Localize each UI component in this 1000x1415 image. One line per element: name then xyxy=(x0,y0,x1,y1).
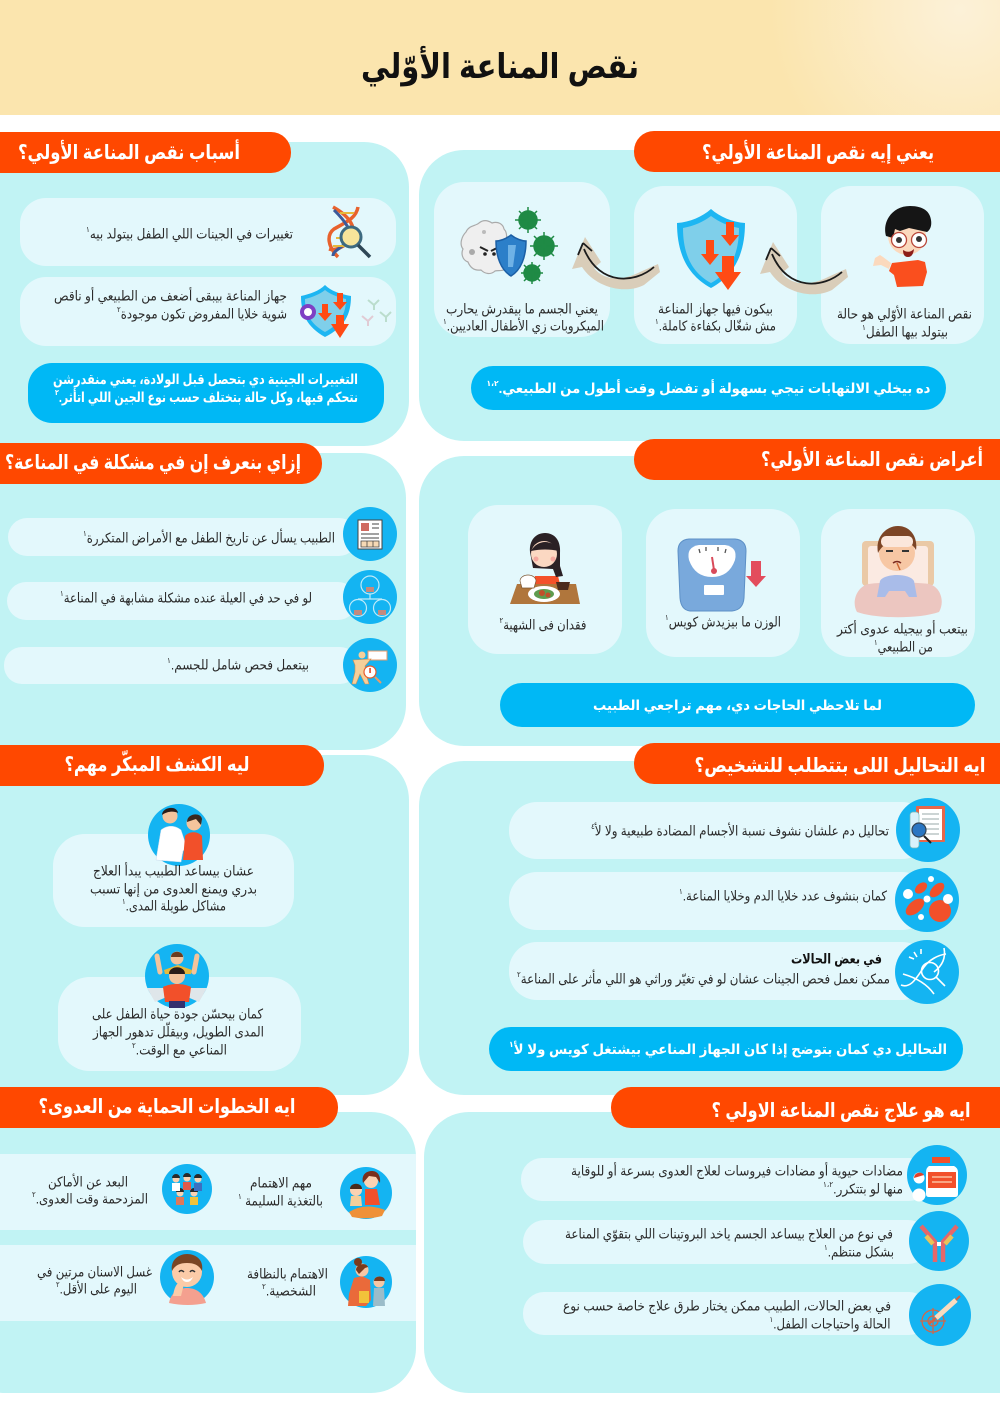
card: start treatment early xyxy=(53,804,294,927)
item: teeth xyxy=(37,1264,152,1298)
item: medical history xyxy=(8,507,397,561)
text xyxy=(836,620,968,656)
text: عشان بيساعد الطبيب يبدأ العلاج xyxy=(93,862,254,880)
text: ٢ xyxy=(500,616,503,624)
item: full exam: ١ xyxy=(167,656,171,664)
text: ٢ xyxy=(132,1040,136,1050)
text: تغييرات في الجينات اللي الطفل بيتولد بيه xyxy=(90,226,319,242)
icon: shield with down arrows xyxy=(677,209,745,290)
heading: symptoms xyxy=(634,439,1000,480)
item: teeth: اليوم على الأقل. xyxy=(60,1282,150,1296)
item: full exam xyxy=(4,638,397,692)
text: ١ xyxy=(874,638,878,646)
item: immunoglobulin: ١ xyxy=(824,1242,828,1252)
card: weak immune system xyxy=(634,186,797,344)
callout: ده بيخلي الالتهابات تيجي بسهولة أو تفضل وقت أطول من الطبيعي. xyxy=(499,380,955,396)
heading: causes xyxy=(0,132,291,173)
text xyxy=(443,302,604,334)
item: gene test: ٢ xyxy=(517,970,521,978)
card: weak immune cells xyxy=(20,277,396,346)
icon: father with child on shoulders xyxy=(145,944,209,1008)
text: ١ xyxy=(655,316,659,326)
item: family history: ١ xyxy=(60,588,64,598)
text: من الطبيعي xyxy=(878,640,944,654)
icon: doctor and patient xyxy=(148,804,210,866)
icon: body check xyxy=(343,638,397,692)
text: ١ xyxy=(443,316,447,326)
item: family history: لو في حد في العيلة عنده مشكلة مشابهة في المناعة xyxy=(64,590,352,606)
item: nutrition: بالتغذية السليمة xyxy=(246,1194,333,1208)
callout: التحاليل دي كمان بتوضح إذا كان الجهاز المناعي بيشتغل كويس ولا لأ xyxy=(514,1041,971,1057)
text: بيتعب أو بيجيله عدوى أكتر xyxy=(836,620,968,638)
text xyxy=(837,306,972,340)
title: نقص المناعة الأوّلي xyxy=(361,45,639,87)
text: كمان بيحسّن جودة حياة الطفل على xyxy=(92,1006,263,1022)
item: antibiotics xyxy=(521,1145,967,1205)
icon: crowd of children xyxy=(162,1164,212,1214)
band: hygiene and teeth xyxy=(0,1245,416,1321)
item: nutrition: مهم الاهتمام xyxy=(250,1176,312,1192)
panel: what is primary immunodeficiency xyxy=(419,131,1000,441)
item: antibiotics: منها لو بتتكرر. xyxy=(833,1182,910,1196)
panel: prevention xyxy=(0,1087,416,1393)
text xyxy=(655,302,776,334)
card: cannot fight germs xyxy=(434,182,610,337)
icon: dna search xyxy=(895,940,959,1004)
icon: small shield with cell and antibodies xyxy=(300,285,391,338)
item: hygiene: الاهتمام بالنظافة xyxy=(247,1266,328,1282)
heading: what is it xyxy=(634,131,1000,172)
icon: sick child in bed xyxy=(855,526,942,617)
icon: mother and child xyxy=(340,1256,392,1308)
item: immunoglobulin: في نوع من العلاج بيساعد الجسم ياخد البروتينات اللي بتقوّي المناعة xyxy=(565,1226,893,1242)
item: blood tests: تحاليل دم علشان نشوف نسبة الأجسام المضادة طبيعية ولا لأ xyxy=(595,824,928,838)
icon: lab report xyxy=(896,798,960,862)
icon: medical record xyxy=(343,507,397,561)
callout xyxy=(28,363,384,423)
item: crowds: البعد عن الأماكن xyxy=(48,1174,128,1190)
item: family history xyxy=(7,570,397,624)
callout: التغييرات الجينية دي بتحصل قبل الولادة، يعني منقدرشن xyxy=(53,371,358,389)
item: crowds xyxy=(32,1174,148,1208)
text: يعني الجسم ما بيقدرش يحارب xyxy=(446,302,598,318)
icon: antibody xyxy=(909,1211,969,1271)
text: جهاز المناعة بيبقى أضعف من الطبيعي أو ناقص xyxy=(54,286,287,304)
heading: early detection xyxy=(0,745,324,786)
callout: نتحكم فيها، وكل حالة بتختلف حسب نوع الجين اللي اتأثر. xyxy=(59,389,441,405)
panel: causes xyxy=(0,132,409,446)
item: specialized treatment: في بعض الحالات، الطبيب ممكن يختار طرق علاج خاصة حسب نوع xyxy=(563,1298,891,1314)
card: weight xyxy=(646,509,800,657)
icon: medicine bottle xyxy=(907,1145,967,1205)
text: بدري ويمنع العدوى من إنها تسبب xyxy=(90,882,257,898)
icon: mother feeding child xyxy=(340,1167,392,1219)
callout: لما تلاحظي الحاجات دي، مهم تراجعي الطبيب xyxy=(593,697,882,715)
heading: what is it: يعني إيه نقص المناعة الأولي؟ xyxy=(702,139,934,165)
heading: treatment xyxy=(611,1087,1000,1128)
item: blood counts xyxy=(509,868,959,932)
item: specialized treatment xyxy=(523,1284,971,1346)
text xyxy=(90,862,257,914)
heading: causes: أسباب نقص المناعة الأولي؟ xyxy=(18,138,240,165)
panel: early detection xyxy=(0,745,409,1095)
item: hygiene: الشخصية. xyxy=(266,1284,321,1298)
item: blood counts: ١ xyxy=(679,886,683,896)
item: blood tests: ٤ xyxy=(591,822,595,830)
title banner xyxy=(0,0,1000,115)
text: نقص المناعة الأوّلي هو حالة xyxy=(837,306,972,322)
icon: girl at table xyxy=(510,533,580,604)
item: teeth: غسل الاسنان مرتين في xyxy=(37,1264,152,1280)
item: immunoglobulin xyxy=(523,1211,969,1271)
callout: ١ xyxy=(509,1040,514,1048)
icon: family tree xyxy=(343,570,397,624)
card: quality of life xyxy=(58,944,301,1071)
item: crowds: ٢ xyxy=(32,1190,36,1198)
card: born with it xyxy=(821,186,984,344)
item: nutrition xyxy=(238,1176,323,1208)
item: specialized treatment: ١ xyxy=(770,1314,773,1324)
item: gene test: في بعض الحالات xyxy=(791,952,882,966)
heading: how to know: إزاي بنعرف إن في مشكلة في المناعة؟ xyxy=(5,452,301,475)
icon: boy with glasses xyxy=(873,206,931,287)
item: specialized treatment: الحالة واحتياجات الطفل. xyxy=(773,1316,909,1332)
text xyxy=(92,1006,264,1058)
text: ١ xyxy=(122,896,126,906)
text: فقدان فى الشهية xyxy=(503,618,600,632)
text: المدى الطويل، وبيقلّل تدهور الجهاز xyxy=(92,1022,264,1040)
text: شوية خلايا المفروض تكون موجودة xyxy=(121,306,313,322)
callout xyxy=(489,1027,963,1071)
item: blood counts: كمان بنشوف عدد خلايا الدم وخلايا المناعة. xyxy=(683,888,917,904)
text: ٢ xyxy=(117,304,121,314)
icon: scale with arrow xyxy=(678,539,766,611)
callout xyxy=(500,683,975,727)
callout: ٢ xyxy=(55,388,59,396)
panel: treatment xyxy=(424,1087,1000,1393)
heading: how to know xyxy=(0,443,322,484)
text: الميكروبات زي الأطفال العاديين. xyxy=(447,318,626,334)
text: بيتولد بيها الطفل xyxy=(866,324,958,340)
text: ١ xyxy=(665,612,669,622)
item: teeth: ٢ xyxy=(56,1280,60,1288)
panel: tests xyxy=(419,743,1000,1095)
icon: white cell with shield and viruses xyxy=(461,207,558,284)
item: full exam: بيتعمل فحص شامل للجسم. xyxy=(171,658,325,672)
icon: blood cells xyxy=(895,868,959,932)
item: hygiene: ٢ xyxy=(262,1282,266,1290)
heading: early detection: ليه الكشف المبكّر مهم؟ xyxy=(64,750,250,776)
icon: dna with magnifier xyxy=(329,207,370,257)
callout xyxy=(471,366,946,410)
text: مش شغّال بكفاءة كاملة. xyxy=(659,318,795,334)
heading: prevention xyxy=(0,1087,338,1128)
icon: boy brushing teeth xyxy=(160,1250,214,1305)
item: hygiene xyxy=(247,1266,328,1298)
heading: prevention: ايه الخطوات الحماية من العدوى؟ xyxy=(38,1096,296,1118)
arrow: step 2 to 3 xyxy=(572,237,660,289)
text: مشاكل طويلة المدى. xyxy=(126,898,243,914)
text xyxy=(54,286,287,322)
item: gene test xyxy=(509,940,959,1004)
item: medical history: الطبيب يسأل عن تاريخ الطفل مع الأمراض المتكررة xyxy=(87,530,373,546)
item: medical history: ١ xyxy=(83,528,87,538)
item: gene test: ممكن نعمل فحص الجينات عشان لو في تغيّر وراثي هو اللي مأثر على المناعة xyxy=(521,972,944,986)
panel: symptoms xyxy=(419,439,1000,746)
text: المناعي مع الوقت. xyxy=(136,1042,239,1058)
item: antibiotics: مضادات حيوية أو مضادات فيروسات لعلاج العدوى بسرعة أو للوقاية xyxy=(571,1162,903,1180)
item: crowds: المزدحمة وقت العدوى. xyxy=(36,1192,164,1206)
text: بيكون فيها جهاز المناعة xyxy=(658,302,773,318)
item: nutrition: ١ xyxy=(238,1192,242,1200)
band: nutrition and crowds xyxy=(0,1154,416,1230)
arrow: step 1 to 2 xyxy=(760,242,848,294)
heading: tests xyxy=(634,743,1000,784)
card: loss of appetite xyxy=(468,505,622,654)
item: immunoglobulin: بشكل منتظم. xyxy=(828,1244,904,1260)
panel: how to know xyxy=(0,443,406,750)
text: ١ xyxy=(86,224,90,234)
card: gene changes xyxy=(20,198,396,266)
text: الوزن ما بيزيدش كويس xyxy=(669,614,800,630)
callout: ١،٢ xyxy=(486,378,499,388)
item: antibiotics: ١،٢ xyxy=(823,1180,833,1188)
text: ١ xyxy=(862,322,866,332)
icon: syringe and target xyxy=(909,1284,971,1346)
item: blood tests xyxy=(509,798,960,862)
card: tired and infections xyxy=(821,509,975,657)
